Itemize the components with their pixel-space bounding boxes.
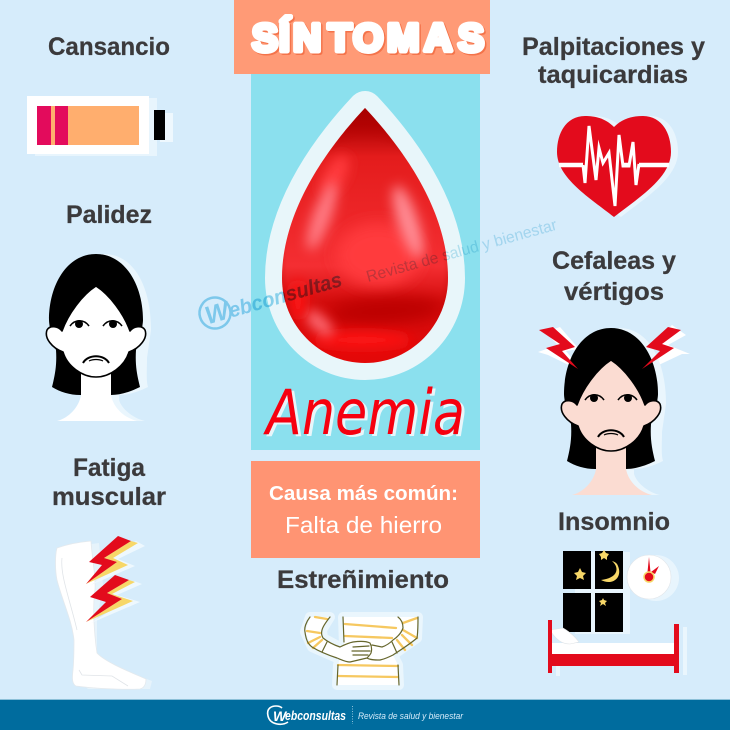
heading: Anemia: Anemia [263,376,465,449]
watermark: logo and tagline: Revista de salud y bienestar [365,217,560,286]
icon: leg with pain bolts [56,536,152,689]
footer tagline: Revista de salud y bienestar [358,711,464,722]
footer logo [268,706,346,724]
footer bar [0,699,730,730]
icon: face with headache [538,325,690,495]
label: Cefaleas y vértigos: Cefaleas y [552,247,676,275]
callout: most common cause: Causa más común: [269,482,458,505]
icon: pale face [46,254,151,421]
label: Palidez: Palidez [66,201,152,229]
icon: bed, night window and clock [548,550,687,676]
title: SÍNTOMAS [252,16,484,60]
footer logo: W [273,708,288,724]
watermark: logo and tagline: ebconsultas [226,268,345,323]
label: Palpitaciones y taquicardias [522,33,705,89]
label: Insomnio: Insomnio [558,508,670,536]
icon: torso with hands on belly [305,617,418,685]
label: Palpitaciones y taquicardias: taquicardias [538,61,688,89]
label: Palpitaciones y taquicardias: Palpitaciones y [522,33,705,61]
icon: heart with pulse [557,116,678,217]
label: Cefaleas y vértigos [552,247,676,306]
label: Cefaleas y vértigos: vértigos [564,278,664,306]
title: SÍNTOMAS [254,18,486,62]
watermark: logo and tagline: W [202,296,235,330]
footer logo: ebconsultas [285,709,346,723]
label: Fatiga muscular: Fatiga [73,454,146,482]
blood drop [280,105,450,365]
watermark: logo and tagline [196,217,560,332]
label: Cansancio: Cansancio [48,33,170,61]
label: Fatiga muscular [52,454,166,511]
title banner [234,0,490,74]
label: Estreñimiento: Estreñimiento [277,566,449,594]
heading: Anemia: Anemia [266,378,468,451]
icon: low battery [27,96,173,156]
label: Fatiga muscular: muscular [52,483,166,511]
callout: most common cause: Falta de hierro [285,512,442,538]
panel: central blue panel [251,74,480,450]
callout: most common cause [251,461,480,558]
